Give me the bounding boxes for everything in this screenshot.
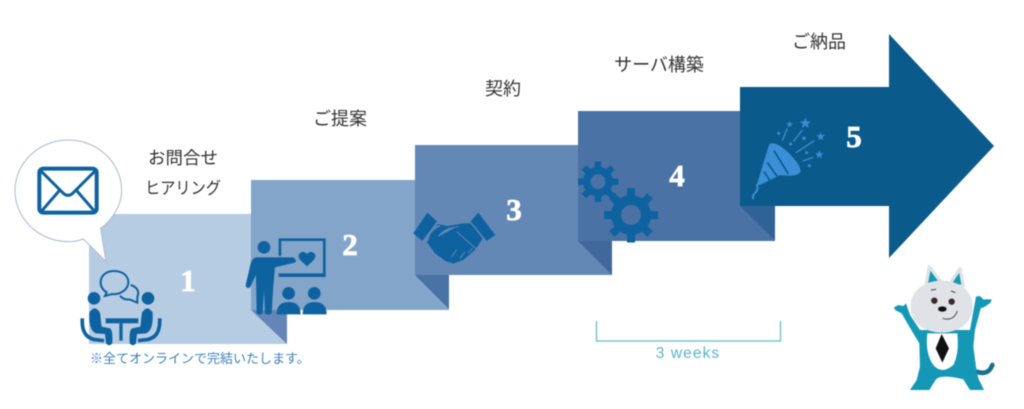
- step 1 panel: [89, 214, 287, 344]
- step 2 panel: [251, 180, 449, 310]
- body and arms: [894, 296, 992, 390]
- step numbers: 1: [180, 263, 196, 298]
- step 3 panel: [415, 145, 612, 275]
- ears: [926, 267, 963, 286]
- step labels: サーバ構築: [614, 55, 704, 75]
- step labels: 契約: [485, 79, 521, 99]
- icon: handshake: [413, 213, 495, 264]
- mascot character: [894, 267, 992, 390]
- step labels: ご提案: [313, 109, 367, 129]
- head: [911, 281, 973, 333]
- icon: envelope: [39, 169, 97, 213]
- timeline bracket: 3 weeks: 3 weeks: [656, 345, 720, 362]
- speech bubble with envelope icon: [15, 140, 122, 262]
- icon: party popper: [753, 117, 825, 199]
- belly: [927, 333, 958, 370]
- tie: [936, 334, 949, 363]
- step numbers: 5: [846, 119, 862, 154]
- face: [931, 289, 957, 319]
- step 5 arrow: [740, 34, 994, 258]
- small gear: [578, 162, 618, 202]
- step numbers: 4: [669, 158, 685, 193]
- icon: gears: [578, 162, 658, 242]
- step labels: ご納品: [792, 32, 846, 52]
- large gear: [604, 188, 658, 242]
- icon: presenter with heart board: [246, 238, 327, 315]
- step labels: お問合せ: [148, 148, 218, 168]
- tail: [977, 365, 992, 373]
- icon: meeting at table: [82, 271, 160, 345]
- step numbers: [180, 119, 862, 298]
- step numbers: 3: [506, 192, 522, 227]
- step 4 panel: [578, 111, 775, 241]
- step numbers: 2: [342, 227, 358, 262]
- step labels: [145, 32, 846, 198]
- note text: ※全てオンラインで完結いたします。: [90, 351, 310, 366]
- step labels: ヒアリング: [145, 179, 221, 198]
- timeline bracket: 3 weeks: [596, 321, 780, 362]
